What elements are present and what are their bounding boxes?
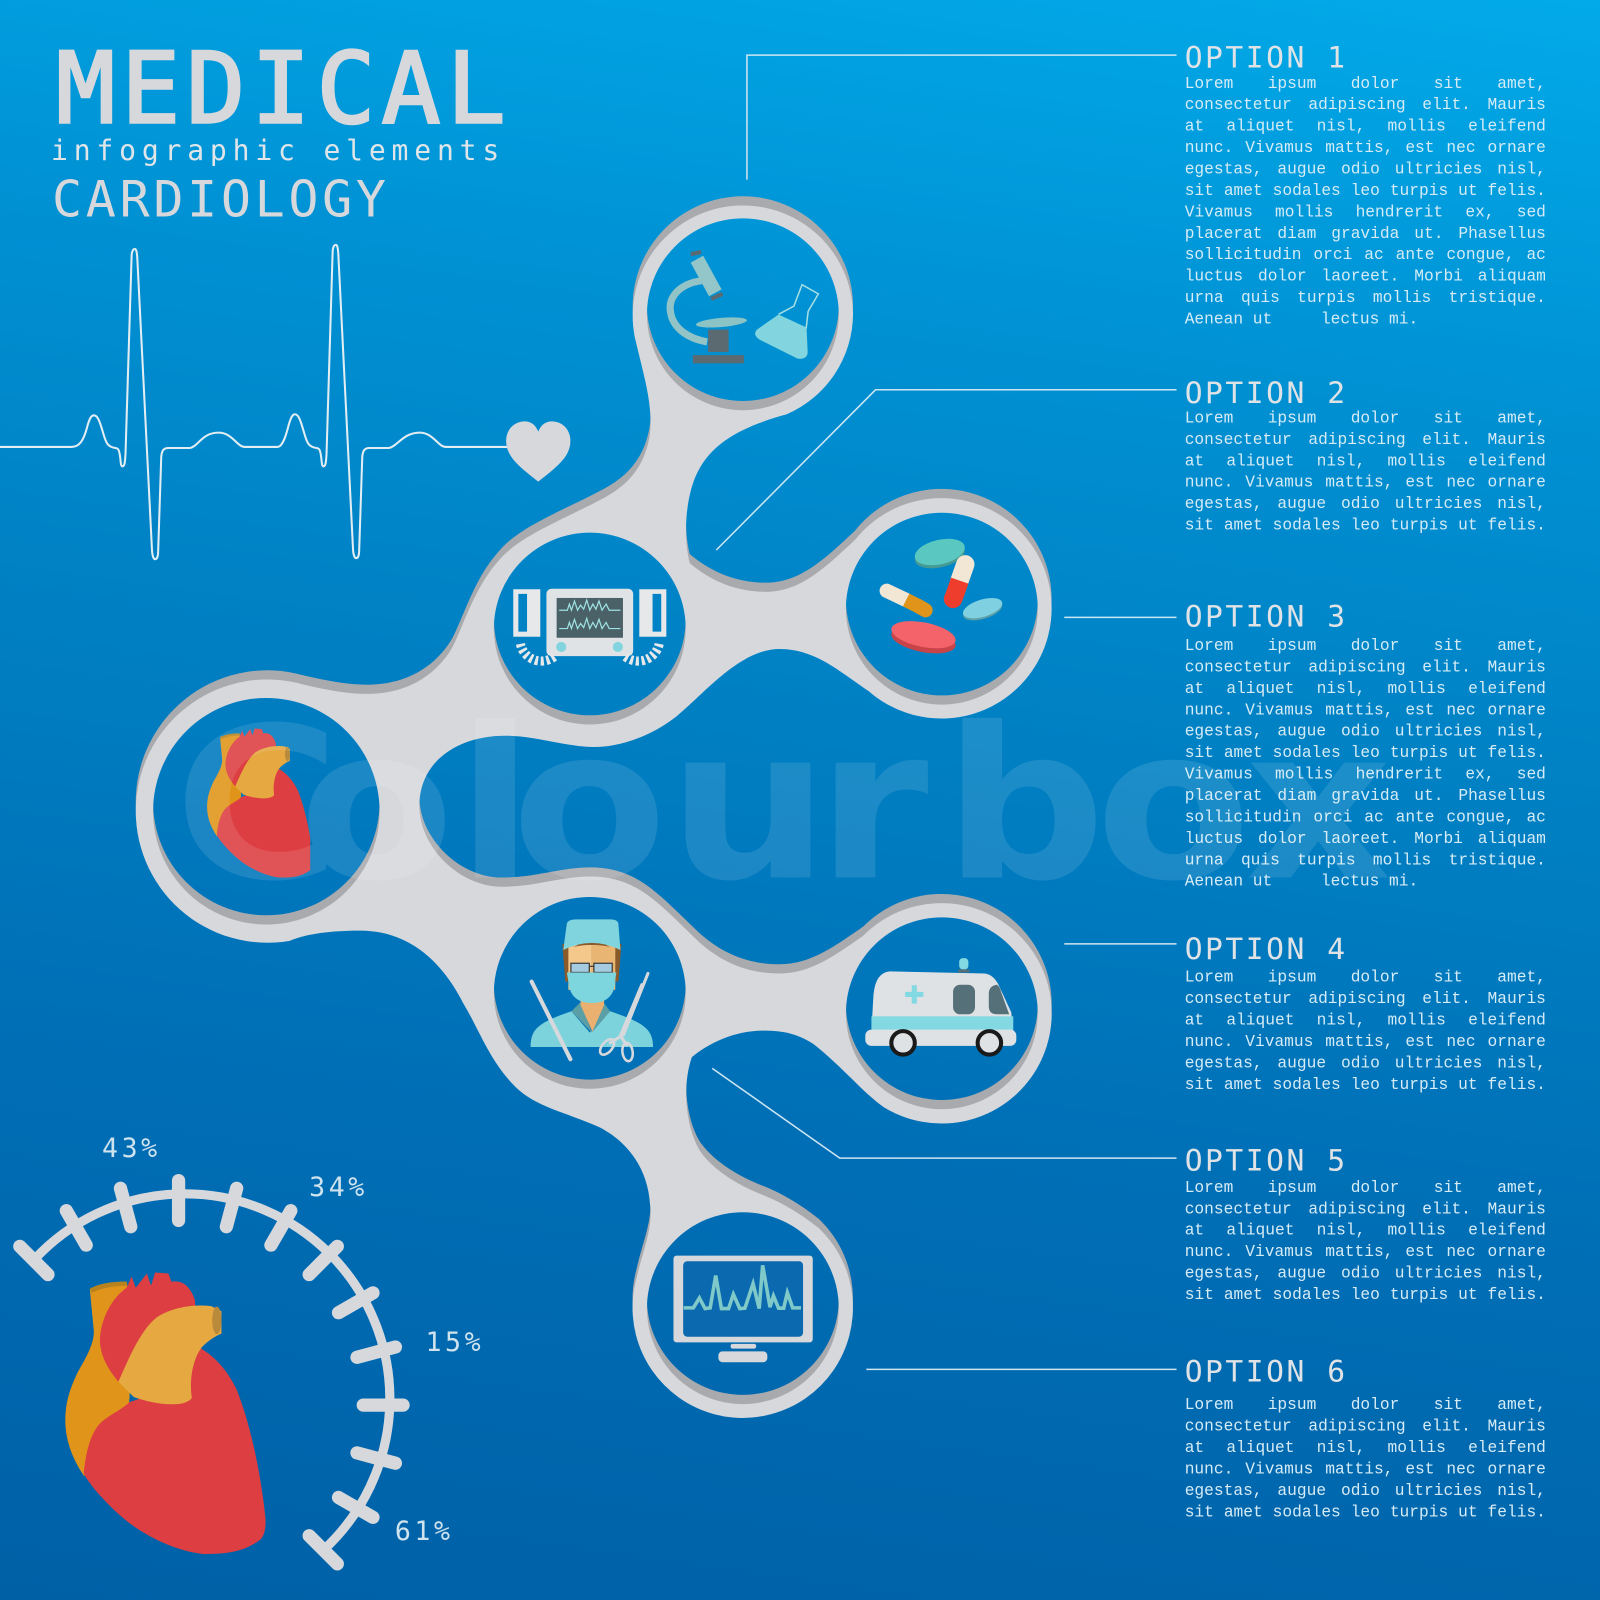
icon: microscope <box>670 252 747 363</box>
option 3 text: egestas, augue odio ultricies nisl, <box>1185 722 1546 741</box>
icon: heart monitor <box>673 1256 813 1362</box>
option 2 text: OPTION 2 <box>1185 375 1348 410</box>
title <box>51 32 512 228</box>
option 1 text: Vivamus mollis hendrerit ex, sed <box>1185 203 1546 221</box>
option 1 text: sit amet sodales leo turpis ut felis. <box>1185 182 1546 200</box>
gauge percentage labels: 15% <box>426 1327 484 1358</box>
option 3 text: consectetur adipiscing elit. Mauris <box>1185 658 1546 677</box>
gauge percentage labels: 34% <box>309 1172 368 1203</box>
option 4 text: egestas, augue odio ultricies nisl, <box>1185 1054 1546 1072</box>
option 6 text: egestas, augue odio ultricies nisl, <box>1185 1482 1546 1500</box>
option 1 text: luctus dolor laoreet. Morbi aliquam <box>1185 267 1546 286</box>
option 2 text: sit amet sodales leo turpis ut felis. <box>1185 516 1546 535</box>
icon: flask <box>757 285 818 357</box>
option 1 text: nunc. Vivamus mattis, est nec ornare <box>1185 139 1546 157</box>
icon: pills <box>887 534 1005 658</box>
option 5 text: consectetur adipiscing elit. Mauris <box>1185 1200 1546 1218</box>
option 5 text: nunc. Vivamus mattis, est nec ornare <box>1185 1243 1546 1261</box>
option 3 text: luctus dolor laoreet. Morbi aliquam <box>1185 830 1546 848</box>
option 6 text <box>1185 1354 1546 1521</box>
option 3 text: sit amet sodales leo turpis ut felis. <box>1185 744 1546 762</box>
title: MEDICAL <box>56 32 512 146</box>
gauge percentage labels: 61% <box>395 1516 454 1547</box>
option 3 text: nunc. Vivamus mattis, est nec ornare <box>1185 701 1546 719</box>
option 4 text: consectetur adipiscing elit. Mauris <box>1185 990 1546 1008</box>
option 5 text <box>1185 1142 1546 1304</box>
title: CARDIOLOGY <box>52 170 390 228</box>
gauge dial <box>20 1181 403 1564</box>
option 3 text: Aenean ut lectus mi. <box>1185 872 1418 891</box>
option 6 text: sit amet sodales leo turpis ut felis. <box>1185 1503 1546 1521</box>
option 5 text: Lorem ipsum dolor sit amet, <box>1185 1179 1546 1197</box>
large anatomical heart <box>65 1272 266 1554</box>
option 4 text: at aliquet nisl, mollis eleifend <box>1185 1011 1546 1030</box>
option 2 text: nunc. Vivamus mattis, est nec ornare <box>1185 473 1546 492</box>
icon: surgeon <box>531 919 653 1062</box>
option 3 text: at aliquet nisl, mollis eleifend <box>1185 680 1546 698</box>
option 6 text: OPTION 6 <box>1185 1354 1348 1388</box>
option 1 text: placerat diam gravida ut. Phasellus <box>1185 224 1546 243</box>
ECG line <box>0 245 508 559</box>
option 1 text: at aliquet nisl, mollis eleifend <box>1185 117 1546 136</box>
option 5 text: egestas, augue odio ultricies nisl, <box>1185 1264 1546 1283</box>
option 1 text: Aenean ut lectus mi. <box>1185 310 1418 329</box>
option 1 text: Lorem ipsum dolor sit amet, <box>1185 74 1546 93</box>
option 1 text: sollicitudin orci ac ante congue, ac <box>1185 246 1546 264</box>
option 3 text: placerat diam gravida ut. Phasellus <box>1185 787 1546 805</box>
option 6 text: Lorem ipsum dolor sit amet, <box>1185 1396 1546 1414</box>
icon: ambulance <box>865 958 1016 1055</box>
option 1 text: urna quis turpis mollis tristique. <box>1185 289 1546 307</box>
option 1 text: egestas, augue odio ultricies nisl, <box>1185 160 1546 179</box>
option 3 text: sollicitudin orci ac ante congue, ac <box>1185 808 1546 827</box>
option 3 text: OPTION 3 <box>1185 598 1348 633</box>
option 4 text: nunc. Vivamus mattis, est nec ornare <box>1185 1033 1546 1051</box>
heart icon at ECG end <box>506 421 570 482</box>
option 2 text: egestas, augue odio ultricies nisl, <box>1185 495 1546 513</box>
option 2 text: at aliquet nisl, mollis eleifend <box>1185 452 1546 470</box>
icon: small heart <box>207 728 313 878</box>
branching body with seven circular holes <box>136 196 1052 1418</box>
watermark: Colourbox <box>174 683 1392 928</box>
option 3 text: Vivamus mollis hendrerit ex, sed <box>1185 765 1546 784</box>
option 3 text: Lorem ipsum dolor sit amet, <box>1185 637 1546 655</box>
option 1 text: OPTION 1 <box>1185 39 1348 74</box>
option 6 text: consectetur adipiscing elit. Mauris <box>1185 1417 1546 1436</box>
option 5 text: OPTION 5 <box>1185 1142 1348 1177</box>
option 6 text: at aliquet nisl, mollis eleifend <box>1185 1439 1546 1457</box>
title: infographic elements <box>51 134 505 167</box>
option 5 text: at aliquet nisl, mollis eleifend <box>1185 1221 1546 1240</box>
option 2 text <box>1185 375 1546 535</box>
icon: defibrillator <box>513 589 666 661</box>
option 2 text: consectetur adipiscing elit. Mauris <box>1185 431 1546 449</box>
option 3 text <box>1184 598 1546 891</box>
option 1 text: consectetur adipiscing elit. Mauris <box>1185 96 1546 114</box>
option 6 text: nunc. Vivamus mattis, est nec ornare <box>1185 1460 1546 1479</box>
leader lines <box>712 55 1177 1369</box>
gauge percentage labels <box>102 1133 484 1547</box>
option 2 text: Lorem ipsum dolor sit amet, <box>1185 409 1546 428</box>
gauge percentage labels: 43% <box>102 1133 161 1164</box>
option 4 text <box>1185 931 1546 1094</box>
option 4 text: OPTION 4 <box>1185 931 1348 966</box>
option 4 text: sit amet sodales leo turpis ut felis. <box>1185 1076 1546 1094</box>
option 1 text <box>1184 39 1546 329</box>
option 3 text: urna quis turpis mollis tristique. <box>1185 851 1546 869</box>
option 5 text: sit amet sodales leo turpis ut felis. <box>1185 1286 1546 1304</box>
option 4 text: Lorem ipsum dolor sit amet, <box>1185 968 1546 987</box>
